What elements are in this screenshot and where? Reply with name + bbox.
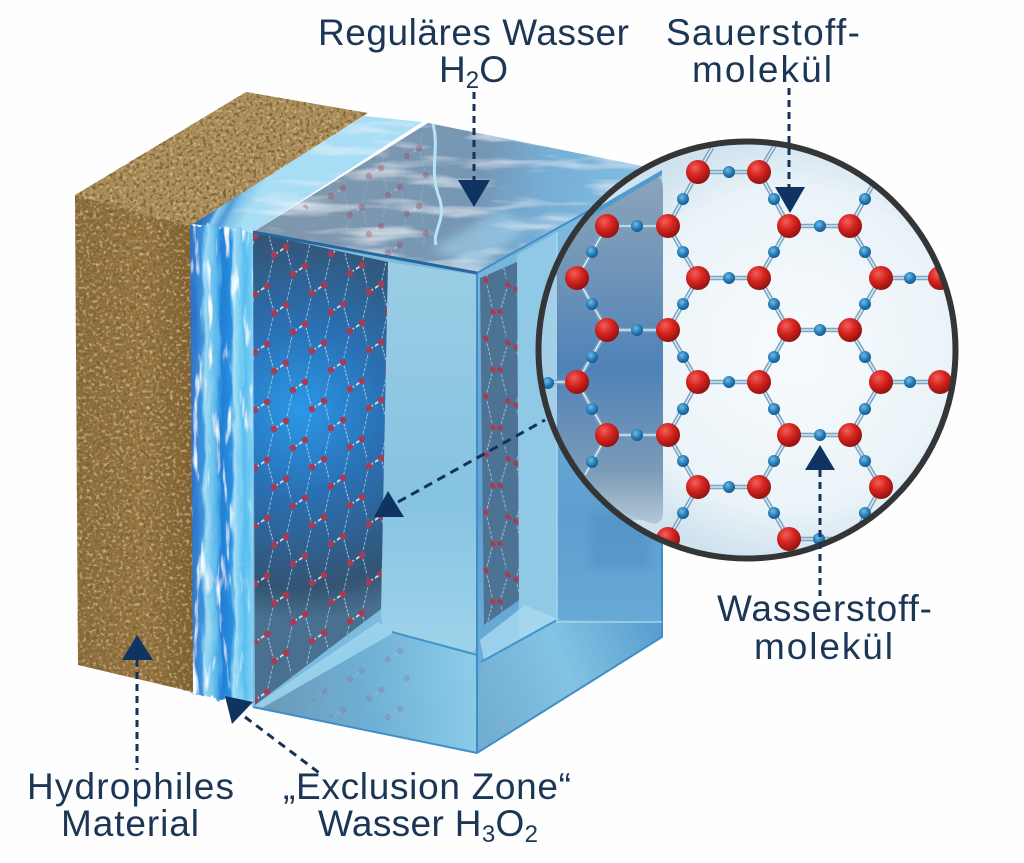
label: exclusion zone water: 3 [482,821,495,848]
label: exclusion zone water: 2 [525,821,538,848]
cube floor right [477,620,662,753]
hydrogen atoms [542,166,916,545]
panel: water cube [253,123,662,753]
label: oxygen molecule: molekül [692,49,832,90]
arrow: regular water [458,92,490,207]
label: hydrogen molecule [717,588,932,667]
label: regular water: 2 [466,67,479,94]
cube floor left [253,628,477,753]
arrow: exclusion zone [225,696,322,775]
panel: hydrophilic sponge block [75,92,368,692]
label: hydrophilic material: Material [61,803,199,844]
arrow: hydrogen molecule [805,445,835,596]
cube left panel with lattice [253,232,393,705]
lens ring [538,142,956,558]
arrow: oxygen molecule [775,88,805,213]
label: hydrogen molecule: Wasserstoff- [717,588,932,629]
label: regular water: Reguläres Wasser [318,12,629,53]
label: oxygen molecule: Sauerstoff- [666,12,860,53]
label: regular water: H [439,49,466,90]
label: hydrophilic material [27,766,234,844]
lens interior [530,140,970,560]
cube top face [253,123,662,273]
label: exclusion zone water: Wasser H [318,803,481,844]
cube inner light strip [381,262,477,652]
label: exclusion zone water: „Exclusion Zone“ [283,766,571,807]
label: regular water: O [479,49,508,90]
label: regular water [318,12,629,94]
lens bonds [548,145,940,539]
cube base fill [253,232,477,753]
layer tops [192,116,422,232]
label: exclusion zone water: O [496,803,524,844]
label: hydrogen molecule: molekül [754,626,893,667]
cube edges [253,170,662,753]
panel: exclusion zone water layers [182,116,422,706]
oxygen atoms [565,160,952,551]
label: hydrophilic material: Hydrophiles [27,766,234,807]
layer fronts [182,222,256,706]
label: oxygen molecule [666,12,860,90]
sponge front face [75,195,193,692]
cube right face [477,170,662,753]
label: exclusion zone water [283,766,571,848]
arrow: lattice zoom connector [374,420,545,517]
arrow: hydrophilic material [122,635,153,770]
panel: magnified lens with hexagonal lattice [530,140,970,560]
sponge top face [75,92,368,226]
